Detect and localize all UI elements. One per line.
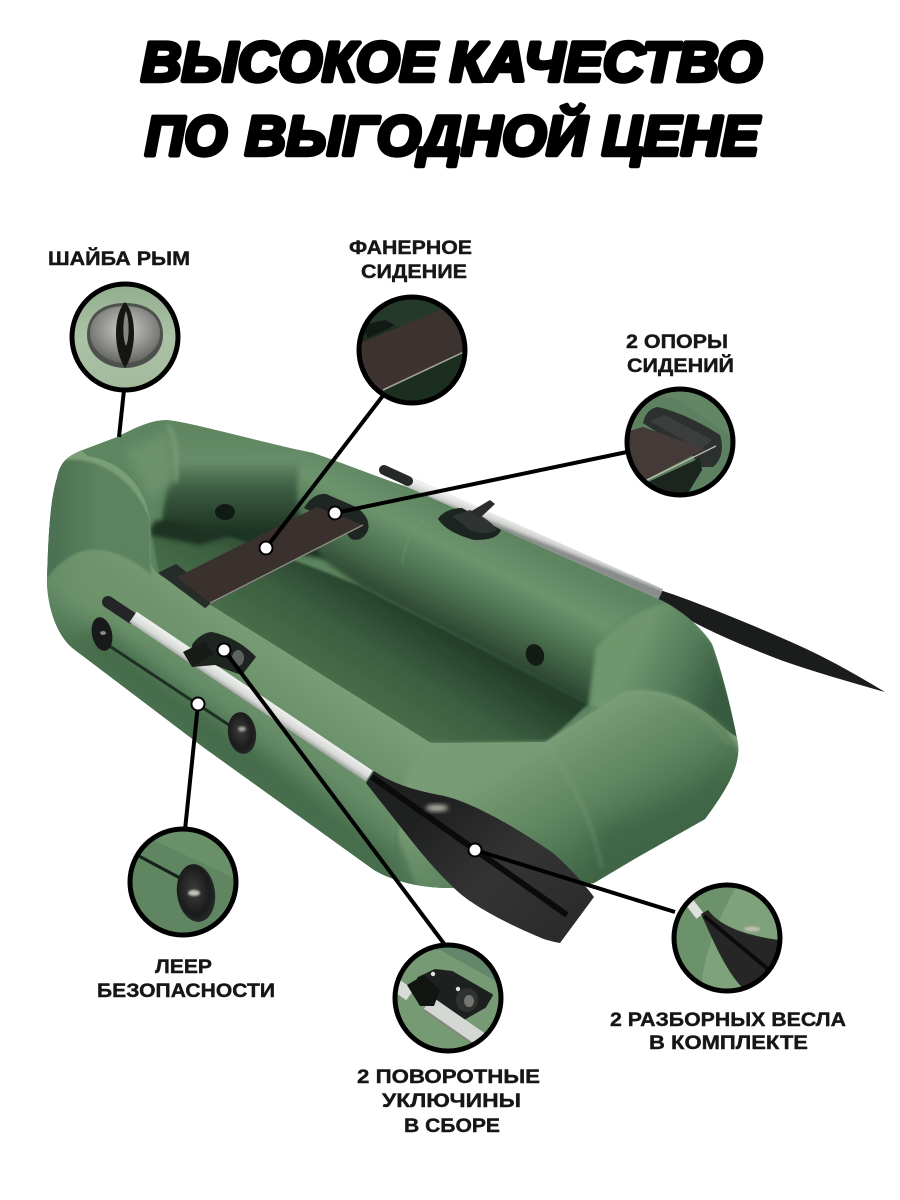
detail: ring washer [70, 282, 180, 437]
far tube end [590, 606, 745, 740]
oar blade [366, 771, 594, 943]
far oar shaft [405, 480, 661, 594]
detail: safety rope [128, 704, 238, 938]
left tube lower highlight [60, 564, 200, 640]
oar handle [108, 602, 132, 618]
plywood seat [160, 494, 368, 607]
far oar blade [657, 590, 885, 692]
detail: plywood seat [266, 295, 475, 548]
label: safety rope [97, 957, 275, 1002]
label: oarlocks: УКЛЮЧИНЫ [382, 1091, 521, 1112]
title: ВЫГОДНОЙ [245, 104, 589, 167]
oar shaft [396, 985, 410, 995]
title [141, 30, 762, 167]
hull shading [47, 420, 738, 888]
near tube lower shadow [60, 630, 400, 885]
label: plywood seat [349, 238, 472, 283]
label: ring washer: ШАЙБА РЫМ [48, 248, 190, 270]
label: oars [610, 1010, 846, 1054]
title: КАЧЕСТВО [450, 30, 762, 93]
floor [150, 525, 588, 745]
oar shaft [133, 617, 369, 776]
rope knob rear [89, 615, 115, 653]
near and left tube [47, 450, 738, 888]
label: oars: В КОМПЛЕКТЕ [649, 1033, 808, 1054]
label: plywood seat: ФАНЕРНОЕ [349, 238, 472, 259]
label: oarlocks: 2 ПОВОРОТНЫЕ [357, 1067, 540, 1088]
floor back shadow [150, 520, 240, 545]
blade spine [372, 777, 567, 915]
support pad [643, 407, 722, 467]
ring: back wall [215, 504, 235, 520]
rope knob front [225, 710, 259, 756]
seam on far tube [402, 556, 404, 564]
marker dots [192, 506, 482, 856]
detail: seat supports [335, 388, 736, 513]
seat board [177, 507, 363, 603]
oarlock plate [418, 970, 492, 1020]
blade highlight [426, 804, 448, 812]
title: ПО [145, 104, 227, 167]
label: oars: 2 РАЗБОРНЫХ ВЕСЛА [610, 1010, 846, 1031]
label: oarlocks: В СБОРЕ [404, 1116, 500, 1137]
inflatable boat [47, 420, 738, 888]
far tube inner wall [297, 445, 663, 706]
bow seams [584, 811, 603, 867]
label: plywood seat: СИДЕНИЕ [361, 262, 467, 283]
far oar behind the boat [384, 470, 885, 692]
rope [108, 645, 232, 727]
title: ЦЕНЕ [602, 104, 761, 167]
left end tube [47, 458, 152, 579]
near seat support [160, 565, 216, 607]
label: safety rope: БЕЗОПАСНОСТИ [97, 981, 275, 1002]
near oar [108, 602, 594, 943]
ring: far wall [523, 642, 547, 668]
safety rope [89, 615, 259, 756]
seat piece [626, 427, 705, 480]
bow surface [395, 691, 745, 895]
near oarlock [183, 632, 256, 675]
back inner wall [160, 420, 340, 560]
label: seat supports: СИДЕНИЙ [627, 355, 734, 377]
label: safety rope: ЛЕЕР [155, 957, 212, 978]
back seam highlight [168, 424, 177, 482]
far oarlock [438, 500, 501, 540]
bow dark shading [606, 780, 730, 876]
far seat support [304, 494, 368, 540]
far oar handle [384, 470, 408, 481]
title: ВЫСОКОЕ [141, 30, 439, 93]
left corner highlight [129, 436, 176, 495]
detail: oarlock [224, 650, 503, 1054]
label: seat supports [626, 332, 734, 377]
boat hull [47, 420, 738, 895]
label: seat supports: 2 ОПОРЫ [626, 332, 728, 353]
detail: oars [475, 850, 785, 994]
clamp [407, 975, 440, 1006]
label: oarlocks [357, 1067, 540, 1137]
